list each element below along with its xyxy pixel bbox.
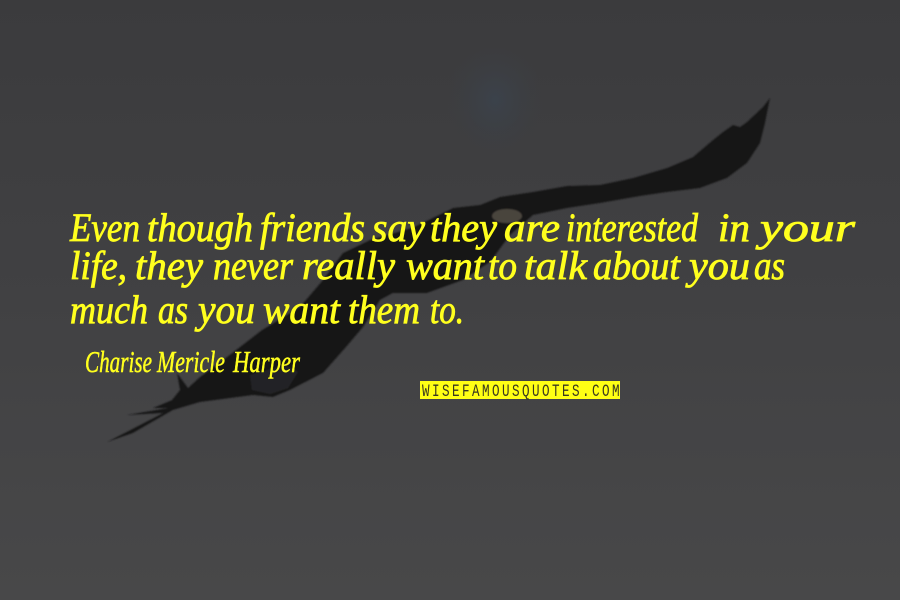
author name: Mericle	[156, 344, 225, 379]
quote text	[69, 205, 856, 332]
quote line 2: never	[213, 243, 293, 288]
author name: Harper	[232, 344, 301, 379]
quote line 2: they	[135, 243, 203, 288]
quote line 3	[70, 287, 464, 332]
quote line 1: they	[430, 205, 497, 250]
quote line 2: life,	[70, 243, 127, 288]
quote line 2: about	[593, 243, 681, 288]
quote line 1: are	[504, 205, 560, 250]
quote line 1	[69, 205, 856, 250]
quote line 2: to	[488, 243, 517, 288]
quote line 1: Even	[69, 205, 140, 250]
quote line 2: as	[754, 243, 785, 288]
quote line 3: much	[70, 287, 148, 332]
quote line 1: interested	[566, 205, 699, 250]
quote line 1: friends	[260, 205, 365, 250]
quote line 1: in	[718, 205, 750, 250]
source badge: WISEFAMOUSQUOTES.COM	[422, 381, 622, 402]
quote line 2: want	[406, 243, 485, 288]
quote line 3: you	[194, 287, 255, 332]
quote line 2: really	[302, 243, 395, 288]
author name	[85, 344, 301, 379]
quote line 1: say	[372, 205, 425, 250]
quote line 1: though	[147, 205, 253, 250]
quote line 3: want	[263, 287, 341, 332]
quote line 2	[70, 243, 785, 288]
quote line 3: as	[158, 287, 188, 332]
quote line 2: talk	[524, 243, 588, 288]
quote line 1: your	[755, 205, 856, 250]
quote line 3: them	[348, 287, 420, 332]
icon: soaring eagle silhouette	[107, 98, 770, 442]
quote line 3: to.	[430, 287, 464, 332]
quote line 2: you	[685, 243, 750, 288]
author name: Charise	[85, 344, 152, 379]
